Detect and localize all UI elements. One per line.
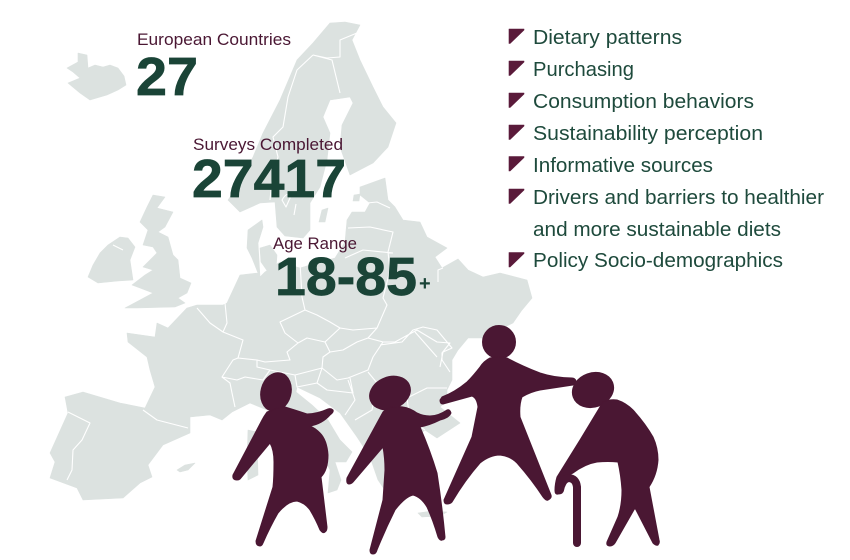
- stat: Age Range: +: [419, 273, 431, 295]
- stat: Surveys Completed: 27417: [192, 149, 346, 209]
- Mediterranean and Baltic islands: [177, 194, 447, 517]
- stat: European Countries: 27: [136, 47, 198, 107]
- map of Europe: [50, 22, 532, 517]
- Scandinavia and Finland: [228, 22, 396, 238]
- bullet markers: [509, 29, 524, 267]
- stat: Age Range: Age Range: [273, 234, 357, 253]
- bullet list of survey topics: Purchasing: [533, 59, 634, 81]
- figure: adult: [347, 370, 451, 554]
- Continental Europe: [50, 178, 532, 505]
- bullet list of survey topics: Dietary patterns: [533, 27, 682, 49]
- stat: European Countries: [136, 30, 291, 107]
- bullet list of survey topics: Sustainability perception: [533, 123, 763, 145]
- stat: Age Range: 18-85: [275, 247, 417, 307]
- Iceland: [67, 53, 126, 100]
- bullet list of survey topics: [509, 27, 824, 272]
- stat: Surveys Completed: Surveys Completed: [193, 135, 343, 154]
- Great Britain: [125, 195, 191, 308]
- bullet list of survey topics: Drivers and barriers to healthier: [533, 187, 824, 209]
- figure: elderly person with cane: [555, 367, 659, 546]
- bullet list of survey topics: and more sustainable diets: [533, 219, 781, 241]
- figures: group of people: [233, 326, 659, 554]
- figure: adult with outstretched arms: [440, 326, 576, 504]
- stat: European Countries: European Countries: [137, 30, 291, 49]
- figure: pregnant woman: [233, 369, 333, 546]
- bullet list of survey topics: Informative sources: [533, 155, 713, 177]
- bullet list of survey topics: Policy Socio-demographics: [533, 250, 783, 272]
- Ireland: [88, 237, 135, 283]
- bullet list of survey topics: Consumption behaviors: [533, 91, 754, 113]
- icon: walking cane: [560, 478, 577, 543]
